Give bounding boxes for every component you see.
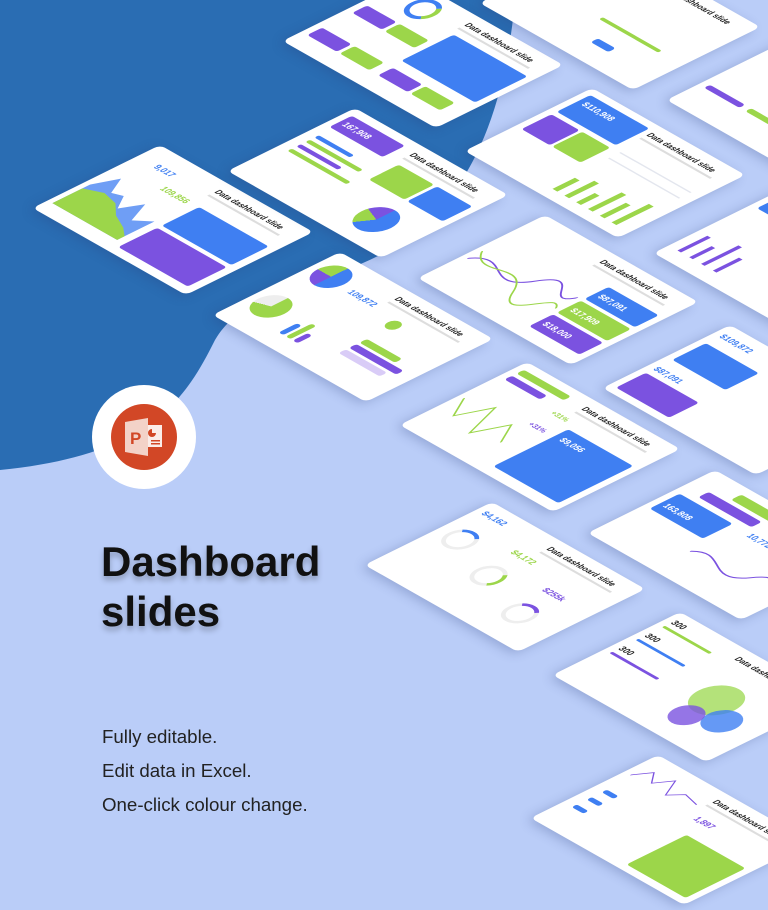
icon: PowerPoint badge	[92, 385, 196, 489]
card: line chart blue boxes slide	[418, 215, 698, 365]
card: 167,908 slide: 167,908	[339, 121, 375, 140]
card: 167,908 slide: Data dashboard slide	[407, 152, 481, 194]
card: $9,056 slide: +31%	[548, 410, 571, 423]
card: 300 venn slide: 300	[642, 632, 664, 644]
card: top right partial slide	[480, 0, 760, 90]
card: 109,872 pie slide	[212, 252, 493, 402]
card: bottom slide: 1,897	[690, 815, 719, 830]
card: 300 venn slide: 300	[615, 645, 638, 657]
title: slides	[101, 588, 220, 635]
card: $9,056 slide: +31%	[525, 421, 549, 434]
card: bottom slide	[530, 755, 768, 905]
card: $4,162 rings slide: Data dashboard slide	[544, 546, 618, 588]
card: 110,908 slide	[464, 88, 745, 238]
card: right 163,808 slide	[588, 470, 768, 620]
card: far right top slide	[666, 37, 768, 187]
card: $9,056 slide: Data dashboard slide	[579, 406, 653, 448]
card: $9,056 slide	[400, 362, 680, 512]
card: $4,162 rings slide: $255k	[539, 586, 569, 603]
card: line chart blue boxes slide: $17,909	[567, 307, 603, 326]
feature list: Fully editable.	[102, 726, 217, 747]
feature list	[102, 726, 308, 815]
card: 167,908 slide	[228, 108, 508, 258]
card: 110,908 slide: $110,908	[579, 101, 618, 122]
card: $4,162 rings slide: $4,172	[508, 549, 540, 566]
card: $4,162 rings slide: $4,162	[478, 510, 511, 527]
card: top slide	[282, 0, 563, 128]
title	[100, 538, 320, 635]
card: 109,872 pie slide: Data dashboard slide	[392, 296, 466, 338]
feature list: Edit data in Excel.	[102, 760, 252, 781]
icon: PowerPoint badge: P	[130, 429, 141, 448]
card: line chart blue boxes slide: $87,091	[595, 293, 631, 313]
card: line chart blue boxes slide: Data dashboard slide	[597, 259, 671, 301]
card: area chart slide: 109,856	[157, 185, 193, 205]
card: far right bars slide	[654, 190, 768, 340]
card: area chart slide	[32, 145, 313, 295]
card: $4,162 rings slide	[364, 502, 645, 652]
card: top slide: Data dashboard slide	[462, 22, 536, 64]
card: 300 venn slide	[552, 612, 768, 762]
title: Dashboard	[101, 538, 320, 585]
card: 110,908 slide: Data dashboard slide	[644, 132, 718, 174]
card: $9,056 slide: $9,056	[556, 436, 588, 454]
card: 109,872 pie slide: 109,872	[345, 288, 381, 308]
card: area chart slide: 9,017	[151, 163, 179, 178]
card: 300 venn slide: 300	[668, 619, 690, 631]
feature list: One-click colour change.	[102, 794, 308, 815]
card: right 109,872 slide: $87,091	[650, 365, 687, 385]
card: line chart blue boxes slide: $18,000	[539, 320, 575, 340]
card: right 109,872 slide: $109,872	[716, 333, 756, 355]
card: right 109,872 slide	[602, 325, 768, 475]
card: area chart slide: Data dashboard slide	[212, 189, 286, 231]
card: right 163,808 slide: 163,808	[660, 502, 696, 522]
